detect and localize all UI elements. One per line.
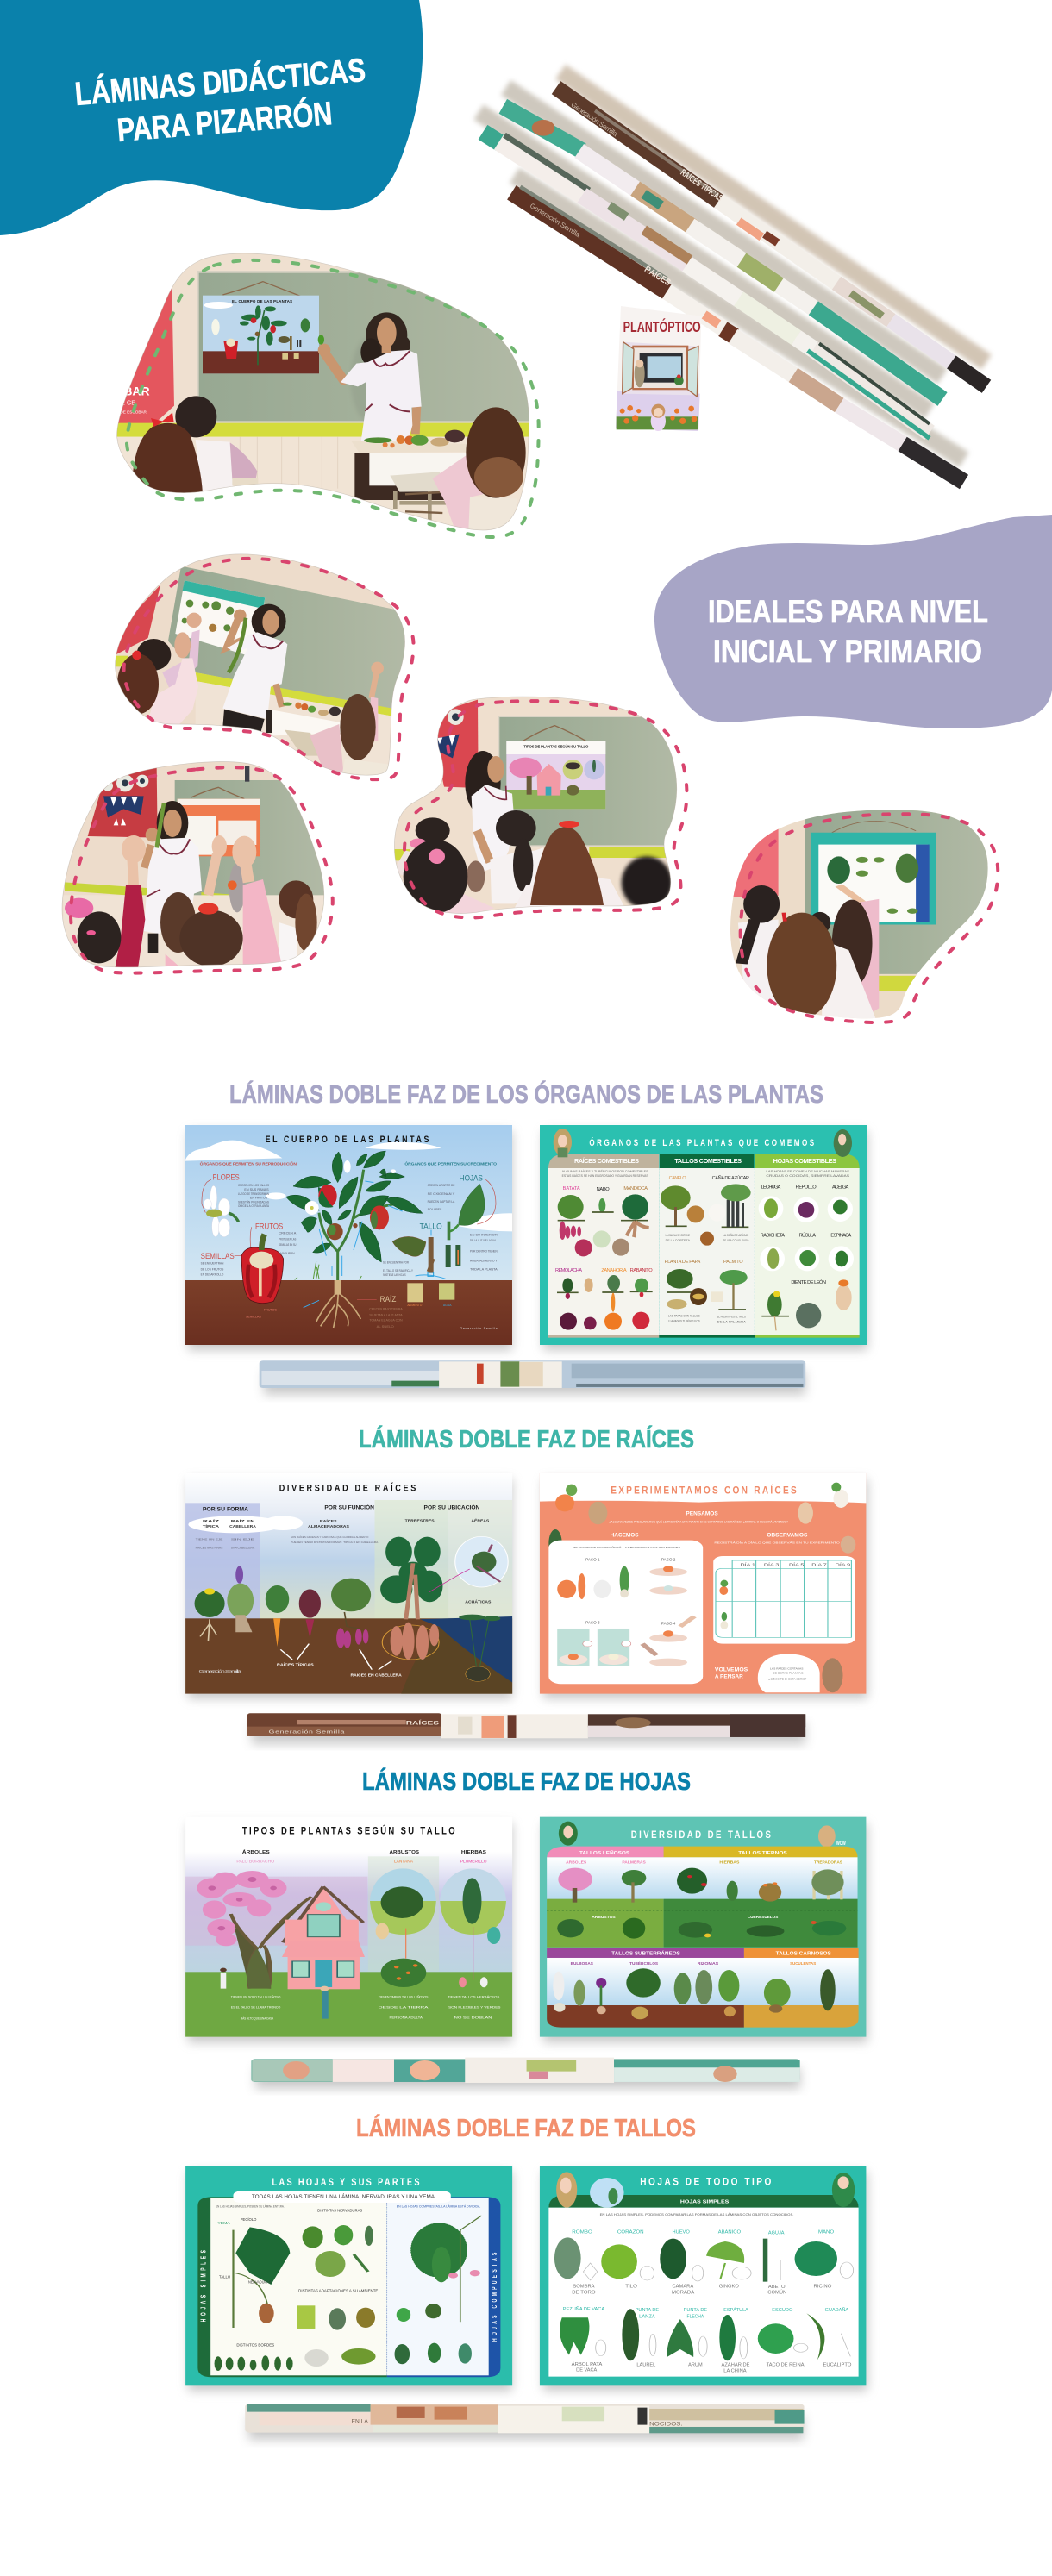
heading: órganos de las plantas: LÁMINAS DOBLE FAZ DE LOS ÓRGANOS DE LAS PLANTAS bbox=[229, 1079, 823, 1109]
poster: diversidad de raíces: POR SU UBICACIÓN bbox=[424, 1504, 479, 1510]
poster: el cuerpo de las plantas: SEMILLAS EN SU bbox=[279, 1243, 297, 1247]
poster: diversidad de tallos: TREPADORAS bbox=[814, 1860, 842, 1865]
plant illustration bbox=[286, 1151, 446, 1328]
title: láminas didácticas para pizarrón: PARA PIZARRÓN bbox=[116, 94, 334, 149]
teacher bbox=[222, 604, 287, 731]
poster: hojas de todo tipo: TACO DE REINA bbox=[767, 2363, 805, 2367]
poster: hojas de todo tipo: HOJAS DE TODO TIPO bbox=[640, 2176, 773, 2188]
poster: hojas de todo tipo: SOMBRA bbox=[573, 2285, 595, 2289]
poster: tipos de plantas según su tallo: TIENEN TALLOS HERBÁCEOS bbox=[448, 1995, 499, 1998]
panel: observation table: DÍA 3 bbox=[764, 1563, 780, 1567]
poster: diversidad de tallos: ARBUSTOS bbox=[592, 1916, 616, 1919]
poster: órganos de las plantas que comemos: NABO bbox=[597, 1187, 610, 1192]
poster: el cuerpo de las plantas: TALLO bbox=[420, 1222, 442, 1231]
poster: diversidad de raíces: SIN EJE bbox=[231, 1538, 255, 1541]
plants and roots bbox=[195, 1536, 508, 1681]
poster: las hojas y sus partes bbox=[185, 2166, 512, 2385]
poster: hojas de todo tipo: ÁRBOL PATA bbox=[572, 2361, 603, 2367]
thought bubble: LAS RAÍCES CORTADAS bbox=[770, 1667, 804, 1670]
leaf labels: LANZA bbox=[639, 2314, 655, 2319]
teacher bbox=[144, 801, 202, 953]
roll A: brown: Generación Semilla bbox=[570, 101, 619, 138]
poster: tipos de plantas según su tallo: SON FLEXIBLES Y VERDES bbox=[448, 2005, 500, 2009]
poster: el cuerpo de las plantas: TODA LA PLANTA bbox=[470, 1267, 498, 1271]
poster: hojas de todo tipo: HOJAS SIMPLES bbox=[680, 2198, 729, 2204]
poster: tipos de plantas según su tallo: PLUMERILLO bbox=[460, 1860, 487, 1864]
poster: experimentamos con raíces bbox=[540, 1473, 866, 1694]
poster: hojas de todo tipo: GINGKO bbox=[719, 2285, 739, 2289]
roll A: brown bbox=[556, 88, 986, 386]
poster: las hojas y sus partes: NERVADURAS bbox=[248, 2280, 271, 2285]
heading: raíces: LÁMINAS DOBLE FAZ DE RAÍCES bbox=[359, 1424, 694, 1454]
poster: diversidad de raíces: Generación Semilla bbox=[198, 1669, 241, 1673]
poster: órganos de las plantas que comemos: RÚCULA bbox=[799, 1233, 816, 1239]
poster: tipos de plantas según su tallo: MÁS ALTO QUE UNA CASA bbox=[241, 2016, 273, 2020]
panel: procedure steps: PASO 1 bbox=[585, 1559, 600, 1562]
poster: el cuerpo de las plantas: AGUA, ALIMENTO Y bbox=[470, 1259, 498, 1262]
poster: órganos de las plantas que comemos: HOJAS COMESTIBLES bbox=[773, 1157, 836, 1165]
poster: el cuerpo de las plantas: EN SUS RAMAS bbox=[244, 1188, 269, 1191]
leaf labels: ESPÁTULA bbox=[723, 2307, 748, 2312]
poster: el cuerpo de las plantas: SE ENCUENTRAN bbox=[201, 1262, 224, 1266]
poster: diversidad de raíces: AÉREAS bbox=[471, 1518, 489, 1523]
leaf and stems bbox=[392, 1184, 485, 1302]
roll 2: RAÍCES bbox=[406, 1720, 439, 1726]
poster: el cuerpo de las plantas: ALIMENTO bbox=[407, 1304, 423, 1307]
poster: hojas de todo tipo: COMÚN bbox=[767, 2290, 786, 2295]
poster: órganos de las plantas que comemos: SE USA CON EL JUGO bbox=[723, 1239, 749, 1242]
poster: órganos de las plantas que comemos: LAS HOJAS SE COMEN DE MUCHAS MANERAS bbox=[766, 1170, 850, 1173]
leaves row 1 bbox=[554, 2237, 837, 2282]
stem poster on the board bbox=[506, 726, 605, 809]
roll 2: Generación Semilla bbox=[269, 1729, 346, 1735]
children bbox=[65, 835, 317, 968]
photo 3: teacher with children raising hands bbox=[58, 756, 333, 973]
characters bbox=[556, 2172, 855, 2208]
leaf labels: PUNTA DE bbox=[636, 2307, 659, 2312]
poster: órganos de las plantas que comemos: CANELO bbox=[669, 1176, 686, 1181]
poster: hojas de todo tipo: TILO bbox=[625, 2285, 637, 2289]
poster: tipos de plantas según su tallo: ÁRBOLES bbox=[242, 1849, 270, 1854]
booklet Plantóptico: PLANTÓPTICO bbox=[623, 318, 701, 335]
poster: diversidad de tallos bbox=[540, 1817, 866, 2037]
poster: experimentamos con raíces: EXPERIMENTAMOS CON RAÍCES bbox=[611, 1485, 798, 1497]
poster: órganos de las plantas que comemos: RADICHETA bbox=[761, 1234, 785, 1239]
poster: el cuerpo de las plantas: FRUTOS bbox=[264, 1309, 278, 1312]
poster: el cuerpo de las plantas: HOJAS bbox=[460, 1173, 483, 1182]
poster title: EL CUERPO DE LAS PLANTAS bbox=[266, 1135, 431, 1145]
poster: el cuerpo de las plantas: EL TALLO SE RAMIFICA Y bbox=[383, 1269, 413, 1272]
poster: diversidad de raíces: RAÍCES bbox=[320, 1519, 337, 1523]
roll D: brown with floral end: RAÍCES bbox=[642, 264, 673, 288]
poster: diversidad de raíces: RAÍZ EN bbox=[231, 1519, 254, 1523]
poster: diversidad de tallos: ÁRBOLES bbox=[566, 1860, 586, 1865]
poster: órganos de las plantas que comemos: MANDIOCA bbox=[623, 1186, 648, 1191]
poster: diversidad de raíces: POR SU FUNCIÓN bbox=[324, 1504, 374, 1510]
poster: diversidad de raíces: RAÍZ bbox=[203, 1519, 220, 1523]
poster: diversidad de raíces: ACUÁTICAS bbox=[465, 1600, 491, 1604]
table and vegetables bbox=[266, 703, 342, 756]
poster: hojas de todo tipo: EUCALIPTO bbox=[823, 2363, 851, 2367]
blue title blob bbox=[0, 0, 423, 235]
poster: hojas de todo tipo: EN LAS HOJAS SIMPLES, PODEMOS COMPARAR LAS FORMAS DE LAS LÁMINAS CON OBJETOS CONOCIDOS. bbox=[600, 2212, 794, 2216]
roll 4: EN LA bbox=[352, 2418, 369, 2424]
flower bbox=[204, 1185, 239, 1237]
poster: órganos de las plantas que comemos: CAÑA DE AZÚCAR bbox=[712, 1175, 749, 1181]
poster: el cuerpo de las plantas: AGUA bbox=[443, 1304, 452, 1307]
poster: diversidad de raíces: DIVERSIDAD DE RAÍCES bbox=[279, 1483, 418, 1493]
poster: diversidad de raíces: SON RAÍCES GRUESAS Y CARNOSAS QUE GUARDAN ALIMENTO bbox=[291, 1535, 368, 1539]
poster: órganos de las plantas que comemos: LECHUGA bbox=[761, 1185, 781, 1190]
poster: el cuerpo de las plantas: AL SUELO bbox=[377, 1325, 394, 1329]
photo 1: teacher pointing at plant poster: S DE ESCOBAR bbox=[116, 410, 147, 414]
outline drawings bbox=[583, 2260, 854, 2359]
panel: procedure steps: PASO 2 bbox=[661, 1559, 675, 1562]
poster: tipos de plantas según su tallo: LANTANA bbox=[394, 1860, 413, 1864]
poster: tipos de plantas según su tallo: TIPOS DE PLANTAS SEGÚN SU TALLO bbox=[242, 1824, 457, 1836]
poster: experimentamos con raíces: PENSAMOS bbox=[686, 1511, 718, 1516]
poster: órganos de las plantas que comemos: REPOLLO bbox=[796, 1185, 817, 1190]
title: láminas didácticas para pizarrón: LÁMINAS DIDÁCTICAS bbox=[73, 51, 367, 113]
leafy vegetables bbox=[759, 1196, 854, 1330]
booklet Plantóptico bbox=[616, 306, 701, 431]
poster: las hojas y sus partes: HOJAS COMPUESTAS bbox=[492, 2252, 498, 2342]
poster: órganos de las plantas que comemos: LA CANELA SE OBTIENE bbox=[666, 1234, 691, 1237]
text: ideales para nivel inicial y primario: INICIAL Y PRIMARIO bbox=[713, 634, 982, 669]
poster: diversidad de tallos: TALLOS CARNOSOS bbox=[776, 1951, 831, 1956]
poster: el cuerpo de las plantas: CRECEN A PARTIR DE bbox=[428, 1184, 455, 1187]
poster: órganos de las plantas que comemos: ACELGA bbox=[832, 1185, 849, 1190]
poster on the board: EL CUERPO DE LAS PLANTAS bbox=[232, 299, 292, 303]
poster: el cuerpo de las plantas: ORIGEN A OTRA PLANTA bbox=[238, 1204, 269, 1208]
poster: el cuerpo de las plantas: Generación Semilla bbox=[460, 1327, 498, 1330]
poster: órganos de las plantas que comemos: PALMITO bbox=[723, 1260, 743, 1265]
poster: el cuerpo de las plantas: PUEDEN CAPTAR LA bbox=[428, 1200, 455, 1204]
stem poster on the board: TIPOS DE PLANTAS SEGÚN SU TALLO bbox=[523, 745, 589, 749]
poster: el cuerpo de las plantas: MADURAN bbox=[280, 1252, 295, 1255]
poster: el cuerpo de las plantas: POR DENTRO TIENEN bbox=[470, 1250, 498, 1254]
poster: hojas de todo tipo: ABETO bbox=[768, 2285, 786, 2289]
poster: hojas de todo tipo: DE TORO bbox=[572, 2291, 596, 2295]
poster: diversidad de raíces: CABELLERA bbox=[229, 1525, 256, 1529]
children on the left bbox=[117, 613, 202, 726]
poster: tipos de plantas según su tallo: DESDE LA TIERRA bbox=[379, 2005, 428, 2009]
leaf labels: CORAZÓN bbox=[617, 2229, 644, 2235]
teacher's table and vegetables bbox=[351, 430, 467, 500]
roll A: brown: RAÍCES TÍPICAS bbox=[679, 166, 725, 203]
poster: el cuerpo de las plantas: DE LA LUZ Y EL AGUA bbox=[470, 1239, 496, 1242]
heading: tallos: LÁMINAS DOBLE FAZ DE TALLOS bbox=[356, 2113, 696, 2142]
poster: diversidad de tallos: RIZOMAS bbox=[698, 1962, 718, 1966]
panel: observation table: DÍA 5 bbox=[789, 1563, 805, 1567]
poster: hojas de todo tipo: AZAHAR DE bbox=[722, 2363, 750, 2367]
poster: hojas de todo tipo: ARUM bbox=[688, 2363, 703, 2367]
poster: el cuerpo de las plantas: PROTEGEN LAS bbox=[279, 1237, 297, 1241]
roll 1 bbox=[260, 1360, 805, 1388]
girl on the right raising hand bbox=[310, 662, 384, 772]
thought bubble bbox=[758, 1654, 820, 1692]
panel: observation table: DÍA 9 bbox=[836, 1563, 850, 1567]
roll 3 bbox=[251, 2058, 800, 2083]
poster: experimentamos con raíces: A PENSAR bbox=[715, 1673, 743, 1679]
children bbox=[220, 1968, 488, 2019]
lilac blob bbox=[654, 515, 1052, 728]
poster: el cuerpo de las plantas: SE ENCUENTRA POR bbox=[383, 1261, 409, 1265]
poster: diversidad de tallos: CUBRESUELOS bbox=[748, 1916, 778, 1919]
teacher bbox=[318, 312, 422, 441]
poster: el cuerpo de las plantas: EN DESARROLLO bbox=[201, 1272, 223, 1276]
monster poster bbox=[88, 767, 158, 838]
poster: diversidad de tallos: SUCULENTAS bbox=[790, 1962, 816, 1966]
cut pepper bbox=[241, 1235, 284, 1304]
poster: tipos de plantas según su tallo: HIERBAS bbox=[461, 1849, 486, 1854]
poster: diversidad de tallos: DIVERSIDAD DE TALLOS bbox=[631, 1829, 773, 1841]
poster: diversidad de raíces: RAÍCES MÁS FINAS bbox=[196, 1547, 223, 1549]
circles: shrub and herb bbox=[370, 1868, 506, 1987]
panel: observation table bbox=[713, 1556, 855, 1644]
panel: procedure steps: PASO 3 bbox=[585, 1621, 600, 1625]
poster: órganos de las plantas que comemos: RABANITO bbox=[630, 1268, 653, 1273]
poster: órganos de las plantas que comemos: RAÍCES COMESTIBLES bbox=[574, 1157, 639, 1165]
poster: las hojas y sus partes: EN LAS HOJAS SIMPLES, POSEEN SU LÁMINA ENTERA. bbox=[216, 2204, 285, 2208]
poster: órganos de las plantas que comemos: LLAMADOS TUBÉRCULOS bbox=[668, 1318, 700, 1322]
poster: el cuerpo de las plantas: ÓRGANOS QUE PERMITEN SU CRECIMIENTO bbox=[404, 1160, 497, 1167]
poster: diversidad de tallos: HIERBAS bbox=[719, 1860, 739, 1865]
poster: las hojas y sus partes: DISTINTOS BORDES bbox=[236, 2343, 274, 2348]
root vegetables bbox=[557, 1194, 653, 1330]
poster: hojas de todo tipo bbox=[540, 2166, 866, 2385]
poster: órganos de las plantas que comemos: DE LA CORTEZA bbox=[666, 1239, 691, 1242]
roll 2 bbox=[247, 1713, 805, 1738]
poster: el cuerpo de las plantas: LUEGO SE TRANSFORMAN bbox=[238, 1192, 269, 1196]
experiment poster on the board bbox=[178, 787, 260, 856]
poster: el cuerpo de las plantas: SOLARES bbox=[428, 1208, 442, 1211]
poster: las hojas y sus partes: LAS HOJAS Y SUS PARTES bbox=[272, 2177, 422, 2188]
leaf labels: MANO bbox=[818, 2229, 834, 2235]
poster: el cuerpo de las plantas: SEMILLAS bbox=[201, 1252, 235, 1260]
panel: observation table: DÍA 7 bbox=[811, 1563, 827, 1567]
poster on the board bbox=[175, 580, 265, 658]
poster: hojas de todo tipo: LA CHINA bbox=[723, 2369, 747, 2373]
panel: procedure steps: EL DOCENTE ACOMPAÑARÁ Y PREPARAMOS LOS MATERIALES bbox=[573, 1546, 680, 1549]
pill heading: TODAS LAS HOJAS TIENEN UNA LÁMINA, NERVADURAS Y UNA YEMA. bbox=[252, 2193, 436, 2199]
panel: observation table: DÍA 1 bbox=[740, 1563, 755, 1567]
poster: el cuerpo de las plantas: SEMILLAS bbox=[246, 1315, 261, 1318]
poster: el cuerpo de las plantas: SUJETAN A LA PLANTA bbox=[369, 1314, 403, 1317]
poster: órganos de las plantas que comemos: EL PALMITO ES EL TALLO bbox=[717, 1315, 746, 1318]
poster: experimentamos con raíces: VOLVEMOS bbox=[715, 1666, 748, 1673]
poster: diversidad de raíces: UNA CABELLERA bbox=[231, 1547, 254, 1549]
red monster bbox=[434, 700, 479, 788]
poster: el cuerpo de las plantas: FLORES bbox=[213, 1173, 240, 1182]
photo 1: teacher pointing at plant poster: E CE bbox=[121, 398, 135, 406]
thought bubble: ¿CÓMO TE DI ESTA SERIE? bbox=[768, 1677, 807, 1680]
poster: tipos de plantas según su tallo bbox=[185, 1817, 512, 2037]
poster: el cuerpo de las plantas: SOSTIENE LAS HOJAS bbox=[383, 1273, 406, 1277]
photo 1: teacher pointing at plant poster: BAR bbox=[123, 384, 150, 397]
poster: el cuerpo de las plantas: EN SU INTERIOR bbox=[470, 1233, 498, 1236]
poster: el cuerpo de las plantas bbox=[185, 1125, 512, 1345]
poster: órganos de las plantas que comemos: ESPINACA bbox=[830, 1234, 852, 1239]
poster: órganos de las plantas que comemos: CRUDAS O COCIDAS, SIEMPRE LAVADAS bbox=[766, 1174, 850, 1178]
poster: diversidad de raíces: TÍPICA bbox=[203, 1524, 220, 1529]
poster: tipos de plantas según su tallo: ARBUSTOS bbox=[390, 1849, 419, 1854]
poster: el cuerpo de las plantas: FRUTOS bbox=[255, 1222, 283, 1231]
leaf labels: AGUJA bbox=[768, 2229, 785, 2235]
heading: hojas: LÁMINAS DOBLE FAZ DE HOJAS bbox=[362, 1766, 691, 1796]
pill heading bbox=[234, 2191, 451, 2203]
photo 1: teacher pointing at plant poster bbox=[110, 247, 541, 537]
leaf labels: PEZUÑA DE VACA bbox=[563, 2306, 604, 2311]
poster: experimentamos con raíces: ¿ALGUNA VEZ SE PREGUNTARON QUÉ LE PASARÍA A UNA PLANTA SI LE CORTAMOS LAS RAÍCES? ¿MORIRÁ O SEGUIRÁ VIVIENDO? bbox=[610, 1520, 788, 1523]
poster: las hojas y sus partes: EN LAS HOJAS COMPUESTAS, LA LÁMINA ESTÁ DIVIDIDA. bbox=[397, 2204, 480, 2208]
poster: las hojas y sus partes: TALLO bbox=[219, 2276, 231, 2279]
poster: diversidad de tallos: TALLOS TIERNOS bbox=[738, 1850, 787, 1855]
poster: experimentamos con raíces: REGISTRÁ DÍA A DÍA LO QUE OBSERVÁS EN TU EXPERIMENTO bbox=[714, 1541, 840, 1544]
poster: las hojas y sus partes: HOJAS SIMPLES bbox=[201, 2250, 208, 2322]
poster: órganos de las plantas que comemos: ALGUNAS RAÍCES Y TUBÉRCULOS SON COMESTIBLES bbox=[562, 1169, 649, 1173]
photo 4: teacher and children from behind bbox=[388, 692, 686, 920]
poster: las hojas y sus partes: YEMA bbox=[217, 2222, 230, 2225]
leaf illustrations bbox=[215, 2216, 481, 2371]
poster: el cuerpo de las plantas: SI ESTÁN POLINIZADAS bbox=[238, 1200, 269, 1204]
poster: órganos de las plantas que comemos: DIENTE DE LEÓN bbox=[791, 1279, 826, 1285]
roll C: teal and white bbox=[483, 132, 930, 438]
roll 4 bbox=[245, 2404, 805, 2433]
poster: diversidad de tallos: PALMERAS bbox=[622, 1860, 646, 1865]
poster: el cuerpo de las plantas: CRECEN A bbox=[279, 1232, 297, 1235]
poster: las hojas y sus partes: PECÍOLO bbox=[241, 2217, 257, 2222]
poster: diversidad de tallos: BULBOSAS bbox=[571, 1962, 593, 1966]
poster: hojas de todo tipo: DE VACA bbox=[576, 2368, 598, 2373]
teacher bbox=[465, 751, 514, 872]
poster: diversidad de raíces: TERRESTRES bbox=[405, 1519, 435, 1523]
poster: diversidad de raíces: PUEDEN TENER DISTINTAS FORMAS: TÍPICA O EN CABELLERA bbox=[291, 1541, 379, 1544]
poster: tipos de plantas según su tallo: TIENEN UN SOLO TALLO LEÑOSO bbox=[231, 1995, 281, 1998]
text: ideales para nivel inicial y primario: IDEALES PARA NIVEL bbox=[708, 594, 988, 629]
poster: las hojas y sus partes: DISTINTAS NERVADURAS bbox=[317, 2209, 362, 2213]
poster: el cuerpo de las plantas: CRECEN BAJO TIERRA bbox=[369, 1307, 403, 1310]
poster: diversidad de raíces bbox=[185, 1473, 512, 1694]
poster: tipos de plantas según su tallo: NO SE DOBLAN bbox=[454, 2016, 492, 2019]
poster: órganos de las plantas que comemos bbox=[540, 1125, 867, 1345]
poster: órganos de las plantas que comemos: ZANAHORIA bbox=[601, 1268, 627, 1273]
poster: hojas de todo tipo: CAMARA bbox=[673, 2285, 694, 2289]
poster: diversidad de tallos: WOW bbox=[836, 1841, 846, 1846]
poster: el cuerpo de las plantas: DE LOS FRUTOS bbox=[201, 1267, 224, 1271]
leaf labels: HUEVO bbox=[673, 2229, 690, 2235]
poster: diversidad de raíces: RAÍCES TÍPICAS bbox=[277, 1662, 314, 1667]
roll 4: NOCIDOS. bbox=[649, 2420, 683, 2427]
poster: las hojas y sus partes: DISTINTAS ADAPTACIONES A SU AMBIENTE bbox=[298, 2290, 378, 2293]
poster: diversidad de tallos: TALLOS LEÑOSOS bbox=[579, 1850, 629, 1855]
poster: órganos de las plantas que comemos: ESTAS RAÍCES SE HAN ENGROSADO Y GUARDAN RESERVAS bbox=[562, 1174, 648, 1178]
leaf labels bbox=[563, 2229, 848, 2319]
poster: órganos de las plantas que comemos: ÓRGANOS DE LAS PLANTAS QUE COMEMOS bbox=[589, 1137, 817, 1148]
poster: el cuerpo de las plantas: ÓRGANOS QUE PERMITEN SU REPRODUCCIÓN bbox=[200, 1160, 297, 1167]
girls on the left bbox=[132, 396, 258, 496]
poster: diversidad de raíces: ALMACENADORAS bbox=[308, 1525, 349, 1529]
poster: órganos de las plantas que comemos: LA CAÑA DE AZÚCAR bbox=[723, 1233, 749, 1237]
poster: tipos de plantas según su tallo: ES EL TALLO SE LLAMA TRONCO bbox=[231, 2005, 281, 2009]
poster: diversidad de tallos: TUBÉRCULOS bbox=[629, 1961, 658, 1966]
poster: el cuerpo de las plantas: EN FRUTOS bbox=[250, 1197, 268, 1200]
panel: procedure steps: PASO 4 bbox=[661, 1622, 676, 1626]
leaf labels: ROMBO bbox=[572, 2229, 592, 2235]
leaf labels: GUADAÑA bbox=[825, 2307, 848, 2312]
leaves row 2 bbox=[560, 2309, 824, 2360]
photo 2: teacher with raised hands bbox=[110, 549, 414, 779]
poster: diversidad de raíces: POR SU FORMA bbox=[203, 1507, 248, 1512]
characters bbox=[554, 1129, 852, 1157]
poster: órganos de las plantas que comemos: REMOLACHA bbox=[555, 1268, 582, 1273]
thought bubble: DE ESTAS PLANTAS bbox=[773, 1672, 804, 1674]
poster: órganos de las plantas que comemos: TALLOS COMESTIBLES bbox=[674, 1157, 742, 1165]
leaf labels: ABANICO bbox=[718, 2229, 741, 2235]
poster: diversidad de tallos: TALLOS SUBTERRÁNEOS bbox=[611, 1951, 680, 1956]
edible stems bbox=[661, 1184, 751, 1310]
leaf labels: ESCUDO bbox=[772, 2307, 793, 2312]
characters and vegetables bbox=[548, 1483, 855, 1692]
poster: diversidad de raíces: TIENE UN EJE bbox=[196, 1538, 223, 1541]
poster: experimentamos con raíces: HACEMOS bbox=[611, 1532, 639, 1538]
poster: órganos de las plantas que comemos: BATATA bbox=[563, 1186, 580, 1191]
front desk and chair bbox=[390, 472, 446, 521]
poster on the board bbox=[203, 282, 319, 373]
house bbox=[282, 1886, 365, 1989]
poster: tipos de plantas según su tallo: TIENEN VARIOS TALLOS LEÑOSOS bbox=[379, 1995, 428, 1998]
leaf labels: PUNTA DE bbox=[684, 2307, 707, 2312]
leaf labels: FLECHA bbox=[687, 2314, 704, 2319]
product photo: rolled posters bbox=[479, 72, 986, 482]
photo 5: girl pointing at poster bbox=[724, 807, 999, 1025]
poster: órganos de las plantas que comemos: DE LA PALMERA bbox=[717, 1320, 747, 1323]
girl on the right bbox=[433, 407, 526, 530]
poster: órganos de las plantas que comemos: PLANTA DE PAPA bbox=[665, 1260, 701, 1265]
children bbox=[397, 810, 672, 916]
poster: hojas de todo tipo: RICINO bbox=[814, 2285, 831, 2289]
poster: diversidad de raíces: RAÍCES EN CABELLERA bbox=[351, 1673, 402, 1678]
roll D: brown with floral end: Generación Semilla bbox=[529, 202, 582, 239]
tree bbox=[197, 1871, 311, 1989]
stem plant illustrations bbox=[553, 1868, 846, 2019]
poster: el cuerpo de las plantas: RAÍZ bbox=[380, 1295, 397, 1304]
poster: el cuerpo de las plantas: CRECEN EN LOS TALLOS bbox=[238, 1184, 269, 1187]
roll B: teal bbox=[503, 106, 942, 399]
poster: el cuerpo de las plantas: SE OXIGENAN Y bbox=[428, 1192, 455, 1196]
poster: hojas de todo tipo: MORADA bbox=[672, 2291, 695, 2295]
poster: el cuerpo de las plantas: TOMAN EL AGUA CON bbox=[369, 1319, 403, 1322]
poster: experimentamos con raíces: OBSERVAMOS bbox=[767, 1532, 808, 1538]
poster: tipos de plantas según su tallo: PERSONA ADULTA bbox=[390, 2016, 423, 2019]
poster: tipos de plantas según su tallo: PALO BORRACHO bbox=[236, 1860, 275, 1864]
poster: órganos de las plantas que comemos: LAS PAPAS SON TALLOS bbox=[668, 1314, 700, 1317]
roll D: brown with floral end bbox=[511, 187, 964, 482]
poster: hojas de todo tipo: LAUREL bbox=[636, 2363, 655, 2367]
title: láminas didácticas para pizarrón bbox=[73, 51, 367, 149]
text: ideales para nivel inicial y primario bbox=[708, 594, 988, 669]
panel: procedure steps bbox=[548, 1541, 703, 1684]
